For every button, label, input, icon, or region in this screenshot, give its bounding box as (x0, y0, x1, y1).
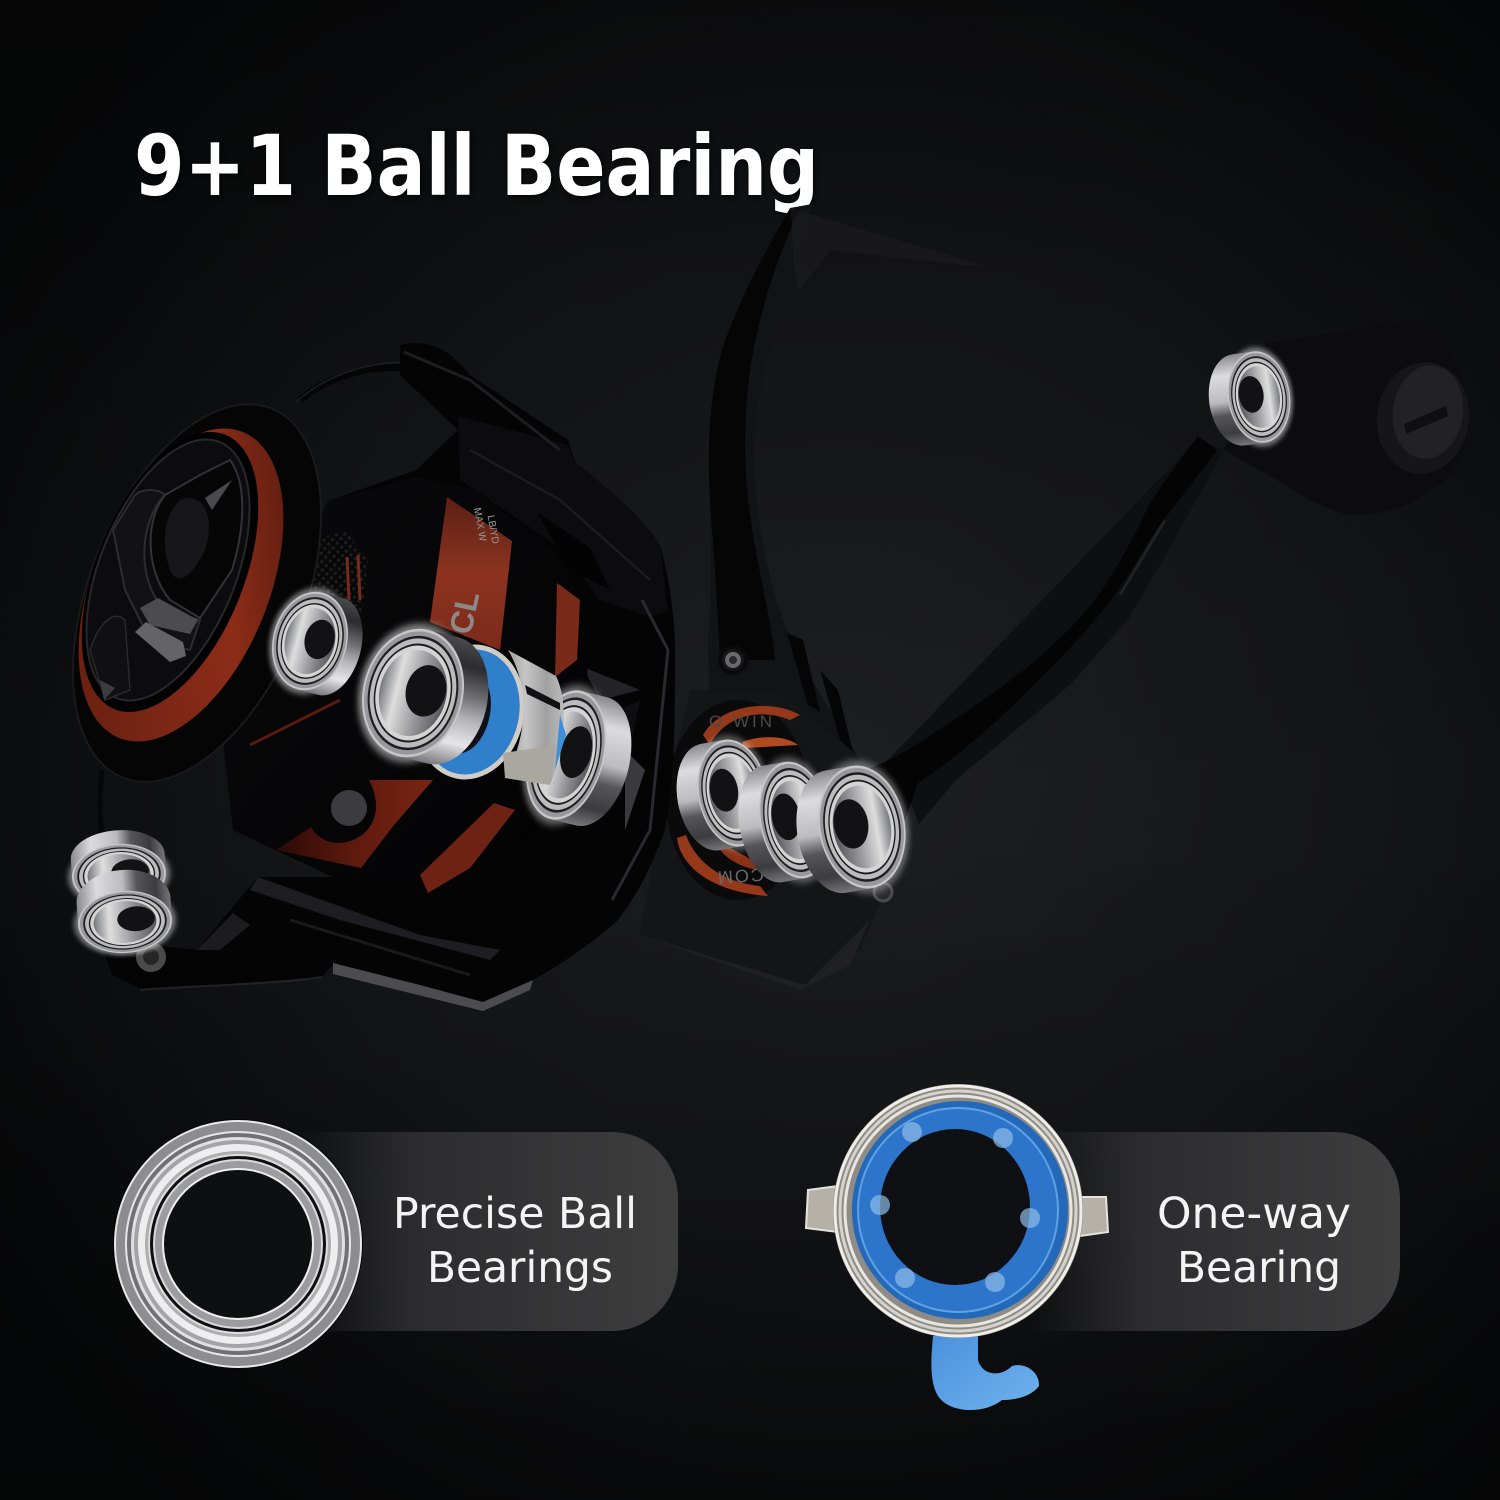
bearing: handle knob (1203, 343, 1299, 453)
gear housing: O WIN (709, 712, 775, 731)
tabs (806, 1186, 838, 1232)
reel frame (100, 343, 675, 1011)
fishing reel (22, 204, 1476, 1011)
panel: one-way bearing (806, 1084, 1400, 1410)
handle arm (870, 436, 1224, 830)
spool: CL (442, 588, 486, 637)
label: precise ball bearings: Precise Ball (393, 1189, 637, 1239)
gear housing (640, 647, 892, 990)
icon: ball bearing (113, 1119, 363, 1369)
bearing: gear front (786, 753, 919, 904)
tail (931, 1336, 1039, 1410)
bearing: front large (344, 612, 503, 779)
bail wire (100, 362, 412, 850)
spool: MAX W (471, 507, 488, 543)
spool hub (90, 460, 242, 700)
title: 9+1 Ball Bearing (136, 119, 820, 217)
bearing: gear left (668, 729, 780, 860)
panel: precise ball bearings (113, 1119, 678, 1369)
icon: one-way bearing (806, 1084, 1108, 1410)
frame lower arm (250, 877, 500, 960)
handle knob (1224, 320, 1476, 515)
spool: LB/YD (485, 514, 500, 545)
bearing: bail upper (65, 827, 172, 912)
spool red bands (276, 497, 580, 893)
label: precise ball bearings (393, 1189, 637, 1293)
spool front disc (22, 367, 372, 819)
title: 9+1 Ball Bearing (134, 117, 819, 215)
spool (221, 477, 590, 893)
label: precise ball bearings: Bearings (427, 1243, 613, 1293)
label: one-way bearing (1157, 1189, 1351, 1293)
callout pill (1030, 1132, 1400, 1331)
frame upper band (458, 416, 668, 617)
bearing: rear of spool (509, 676, 645, 840)
callout pill (300, 1132, 678, 1331)
bearing: one-way in reel (403, 634, 566, 790)
bearing: bail lower (71, 866, 178, 959)
gear housing: COM (715, 864, 764, 888)
bearing: spool small (257, 578, 374, 707)
frame vents (583, 667, 640, 700)
reel foot stem (708, 204, 992, 780)
drag knob stem (230, 530, 368, 745)
label: one-way bearing: One-way (1157, 1189, 1351, 1239)
label: one-way bearing: Bearing (1177, 1243, 1341, 1293)
bearing: gear middle (729, 751, 843, 892)
